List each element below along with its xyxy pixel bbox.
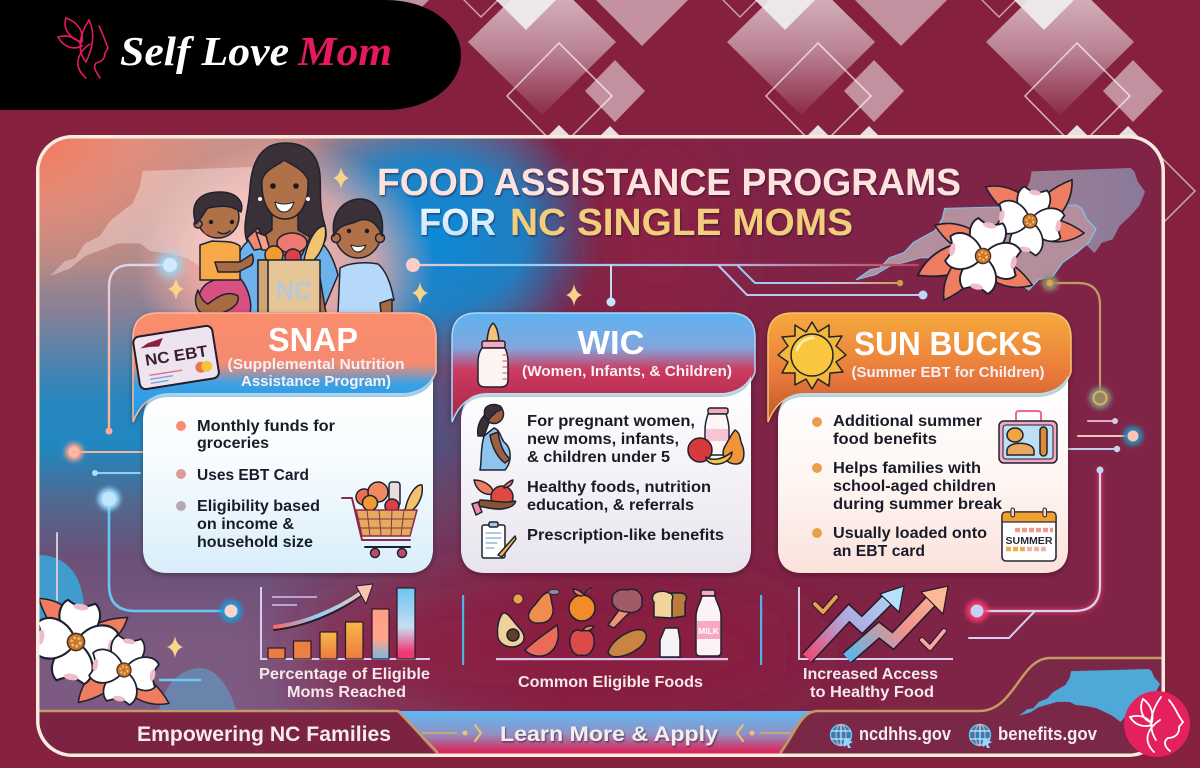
SUN BUCKS bullets: during summer break bbox=[833, 496, 1002, 513]
icon: check marks bbox=[815, 597, 944, 648]
icon: apple leaf bbox=[583, 626, 594, 631]
WIC header bbox=[452, 313, 755, 422]
bottom-left blue blobs bbox=[40, 555, 84, 620]
SUN BUCKS bullets: school-aged children bbox=[833, 478, 996, 495]
grocery bag bbox=[247, 226, 326, 313]
SNAP subheading bbox=[228, 356, 404, 390]
NC map: top-right back bbox=[1027, 168, 1145, 253]
flowers: top right bbox=[918, 176, 1084, 301]
icon: hand holding apple bbox=[472, 480, 516, 515]
WIC list: new moms, infants, bbox=[527, 431, 679, 448]
baby bbox=[194, 192, 253, 313]
icon: summer calendar bbox=[1002, 508, 1056, 561]
WIC subheading: (Women, Infants, & Children) bbox=[522, 363, 732, 380]
SUN BUCKS subheading: (Summer EBT for Children) bbox=[852, 364, 1044, 381]
SNAP bullets: household size bbox=[197, 534, 313, 551]
icon: milk and fruit bbox=[688, 408, 744, 464]
chart label: Percentage of Eligible bbox=[259, 666, 430, 683]
icon: clipboard and pencil bbox=[482, 522, 516, 558]
icon: apple bbox=[570, 630, 594, 655]
WIC list: Healthy foods, nutrition bbox=[527, 479, 711, 496]
mother features bbox=[258, 183, 310, 212]
footer right area bbox=[782, 714, 1140, 754]
icon: summer calendar: SUMMER bbox=[1006, 535, 1053, 547]
boy bbox=[332, 199, 394, 313]
icon: bread loaf bbox=[652, 591, 686, 618]
icon: globe bbox=[830, 724, 853, 748]
logo header bbox=[0, 0, 461, 110]
icon: broccoli head bbox=[612, 589, 642, 613]
icon: orange dot bbox=[513, 594, 523, 604]
title bbox=[377, 162, 961, 244]
mother neck and chest bbox=[262, 212, 310, 255]
SNAP subheading: (Supplemental Nutrition bbox=[228, 356, 404, 373]
link: ncdhhs.gov: ncdhhs.gov bbox=[859, 724, 951, 744]
WIC list: & children under 5 bbox=[527, 449, 670, 466]
mother arm bbox=[309, 278, 326, 313]
arrow: rising access two bbox=[847, 586, 948, 658]
footer centre band bbox=[398, 711, 818, 757]
SUN BUCKS bullets: Helps families with bbox=[833, 460, 981, 477]
SNAP bullets: groceries bbox=[197, 435, 269, 452]
divider bbox=[462, 595, 464, 665]
SUN BUCKS bullets: an EBT card bbox=[833, 543, 925, 560]
sparkles bbox=[168, 167, 582, 306]
panel: SUN BUCKS bbox=[768, 313, 1071, 573]
footer: empowering: Empowering NC Families bbox=[137, 723, 391, 746]
SNAP bullets: Monthly funds for bbox=[197, 418, 335, 435]
WIC list: education, & referrals bbox=[527, 497, 694, 514]
foods shelf bbox=[496, 658, 728, 660]
WIC list bbox=[527, 413, 724, 544]
chart: increased access to healthy food bbox=[799, 586, 953, 701]
divider bbox=[760, 595, 762, 665]
logo wordmark bbox=[120, 28, 392, 74]
line: right stubs bbox=[1068, 418, 1143, 452]
icon: sun bbox=[778, 322, 846, 389]
SNAP header bbox=[133, 313, 436, 422]
chart label: Increased Access bbox=[803, 666, 938, 683]
icon: orange leaf bbox=[573, 588, 592, 596]
SUN BUCKS header bbox=[768, 313, 1071, 422]
title: FOR bbox=[419, 202, 496, 244]
icon: lunchbox bbox=[999, 411, 1057, 463]
circuit lines bbox=[57, 253, 1143, 680]
WIC heading: WIC bbox=[578, 324, 644, 361]
line: upper left connector bbox=[106, 253, 182, 434]
line: top centre connector bbox=[406, 258, 928, 306]
chart label bbox=[259, 666, 430, 701]
icon: pear leaf bbox=[548, 590, 560, 594]
panel: SNAP bbox=[132, 313, 436, 573]
SNAP bullets: on income & bbox=[197, 516, 294, 533]
line: lower right connector bbox=[966, 466, 1104, 638]
logo wordmark: Mom bbox=[297, 28, 392, 74]
sparkle: bottom left bbox=[167, 636, 183, 658]
icon: milk bottle bbox=[696, 590, 721, 656]
chart label: Moms Reached bbox=[287, 684, 406, 701]
illustration: mother and children with grocery bag bbox=[194, 143, 394, 313]
SUN BUCKS heading: SUN BUCKS bbox=[854, 325, 1042, 362]
link: benefits.gov: benefits.gov bbox=[998, 724, 1097, 744]
logo wordmark: Self Love bbox=[120, 28, 289, 74]
NC map: top-right front bbox=[856, 205, 1096, 290]
SNAP bullets bbox=[176, 418, 335, 551]
common eligible foods bbox=[498, 588, 721, 657]
chart: percentage of eligible moms reached bbox=[259, 584, 430, 701]
icon: logo woman and leaves bbox=[58, 18, 108, 78]
footer left band bbox=[40, 712, 434, 754]
arrow: rising access one bbox=[807, 586, 904, 658]
SNAP bullets: Eligibility based bbox=[197, 498, 320, 515]
icon: NC EBT card: NC EBT bbox=[144, 343, 209, 370]
right outline diamond bbox=[1160, 156, 1195, 226]
SUN BUCKS bullets: Additional summer bbox=[833, 413, 982, 430]
footer ornaments bbox=[423, 725, 790, 741]
footer gold line bbox=[38, 658, 1165, 753]
icon: milk carton bbox=[660, 628, 680, 657]
SNAP subheading: Assistance Program) bbox=[241, 373, 391, 390]
grocery bag: NC bbox=[276, 277, 312, 305]
chart label bbox=[803, 666, 938, 701]
SUN BUCKS bullets: Usually loaded onto bbox=[833, 525, 987, 542]
mother hair bbox=[245, 143, 326, 246]
icon: milk bottle: MILK bbox=[698, 626, 720, 636]
footer: learn more: Learn More & Apply bbox=[500, 723, 718, 746]
icon: baby bottle bbox=[478, 323, 508, 387]
icon: avocado bbox=[498, 613, 524, 647]
chart label: to Healthy Food bbox=[810, 684, 934, 701]
SUN BUCKS bullets: food benefits bbox=[833, 431, 937, 448]
badge: logo circle bbox=[1124, 691, 1190, 757]
SUN BUCKS bullets bbox=[812, 413, 1002, 560]
icon: broccoli bbox=[608, 606, 630, 628]
SNAP body bbox=[143, 376, 433, 573]
foods label: Common Eligible Foods bbox=[518, 674, 703, 691]
flowers: bottom left bbox=[40, 598, 170, 706]
WIC body bbox=[461, 376, 751, 573]
SUN BUCKS body bbox=[778, 376, 1068, 573]
icon: pear bbox=[528, 592, 553, 623]
line: left stubs bbox=[65, 443, 143, 476]
background diamond pattern bbox=[386, 0, 1163, 136]
NC map: top-left bbox=[50, 167, 253, 276]
mother body bbox=[236, 236, 338, 313]
icon: globe bbox=[970, 724, 992, 748]
main panel bbox=[36, 135, 1165, 757]
line: lower left connector bbox=[57, 488, 242, 680]
line: gold right connector bbox=[1042, 275, 1111, 409]
WIC list: For pregnant women, bbox=[527, 413, 695, 430]
icon: shopping cart bbox=[342, 482, 422, 558]
title: NC SINGLE MOMS bbox=[510, 202, 853, 244]
icon: pregnant woman bbox=[478, 404, 510, 470]
icon: orange bbox=[569, 595, 595, 621]
icon: bread crust bbox=[669, 593, 686, 618]
NC map: bottom-right blue bbox=[1019, 669, 1160, 722]
icon: NC EBT card bbox=[132, 325, 220, 390]
panel: WIC bbox=[452, 313, 755, 573]
mother face bbox=[262, 160, 308, 219]
icon: watermelon bbox=[525, 625, 558, 656]
title: FOOD ASSISTANCE PROGRAMS bbox=[377, 162, 961, 204]
SNAP heading: SNAP bbox=[268, 321, 358, 358]
SNAP bullets: Uses EBT Card bbox=[197, 467, 309, 484]
icon: baguette bbox=[608, 630, 646, 657]
WIC list: Prescription-like benefits bbox=[527, 527, 724, 544]
